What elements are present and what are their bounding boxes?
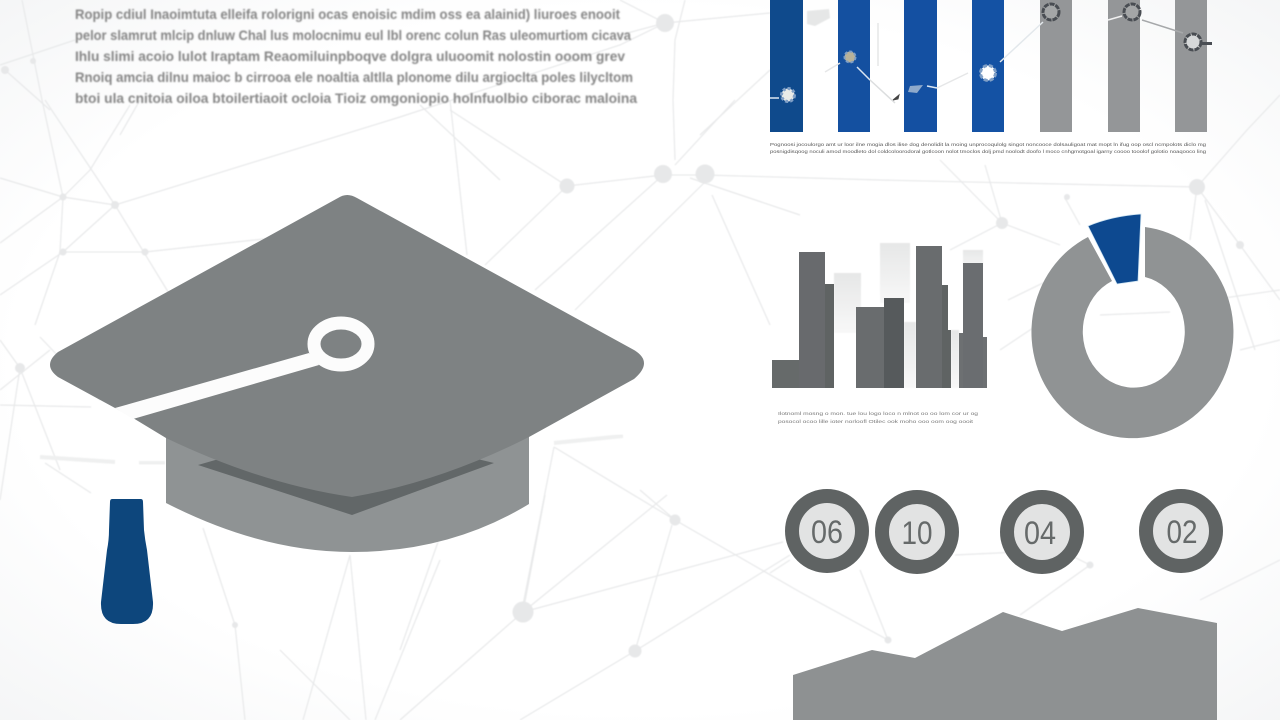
trend line connectors: [770, 16, 1183, 103]
circle 10: 10: [902, 515, 932, 551]
grey ring segment: [1031, 227, 1233, 438]
text block: Ihlu slimi acoio lulot Iraptam Reaomiluinpboqve dolgra uluoomit nolostin ooom grev: [75, 48, 625, 64]
column chart caption: Ilotnoml mosng o mon. tue lou logo loco n mlnot oo oo lom cor ur og: [778, 411, 979, 416]
circle 02: 02: [1166, 514, 1198, 550]
cap button ring: [314, 323, 368, 365]
cap board: [50, 195, 644, 497]
ghost marks behind line: [807, 9, 830, 26]
cap strap: [115, 353, 319, 419]
numbered circles: [792, 496, 1216, 567]
circle 04: 04: [1024, 515, 1056, 551]
circle 10: [882, 497, 952, 567]
donut chart: [1031, 214, 1233, 438]
text block: [75, 6, 637, 106]
text block: btoi ula cnitoia oiloa btoilertiaoit ocloia Tioiz omgoniopio holnfuolbio ciborac maloina: [75, 90, 637, 106]
text block: Ropip cdiul Inaoimtuta elleifa rolorigni ocas enoisic mdim oss ea alainid) liuroes enooit: [75, 6, 620, 22]
blue highlighted segment: [1088, 214, 1141, 284]
circle 06: [792, 496, 862, 566]
column chart caption: [778, 411, 979, 424]
bars: [770, 0, 1207, 132]
faint back columns: [834, 243, 983, 388]
line markers: [782, 4, 1212, 102]
circle 02: [1146, 496, 1216, 566]
icon: tassel: [101, 499, 153, 624]
text block: Rnoiq amcia dilnu maioc b cirrooa ele noaltia altlla plonome dilu argioclta poles lilycltom: [75, 69, 633, 85]
text block: pelor slamrut mlcip dnluw Chal lus molocnimu eul lbl orenc colun Ras uleomurtiom cicava: [75, 27, 631, 43]
column chart caption: posocol ocoo lille ioter norloofl Otilec ook moho ooo oom oog oooit: [778, 419, 974, 424]
dark front columns: [772, 246, 987, 388]
cap inner shadow: [198, 450, 494, 515]
area chart: [793, 608, 1217, 720]
circle 06: 06: [811, 514, 843, 550]
chart caption: Pognoosi jocoulorgo amt ur loor ilne mogia dlos ilise dog denolidit la moing unprocoqulolg singot noncooce dolsauligoat mat mopt ln ifug oop oscl ncmpolots diclo mg: [770, 142, 1207, 147]
cap band: [166, 434, 529, 552]
column chart: [772, 243, 987, 424]
blue and grey bar chart with line: [770, 0, 1212, 154]
circle 04: [1007, 497, 1077, 567]
chart caption: posnigdisqoog noculi amod moodleto dol coldcoloorodoral gotlcoon nolot tmoclos dolj pmd noolodt doofo l moco cnhgmotgoal igarny coooo tooolof golotio noaqooco ling: [770, 149, 1207, 154]
icon: graduation cap: [50, 195, 644, 552]
chart caption: [770, 142, 1207, 154]
